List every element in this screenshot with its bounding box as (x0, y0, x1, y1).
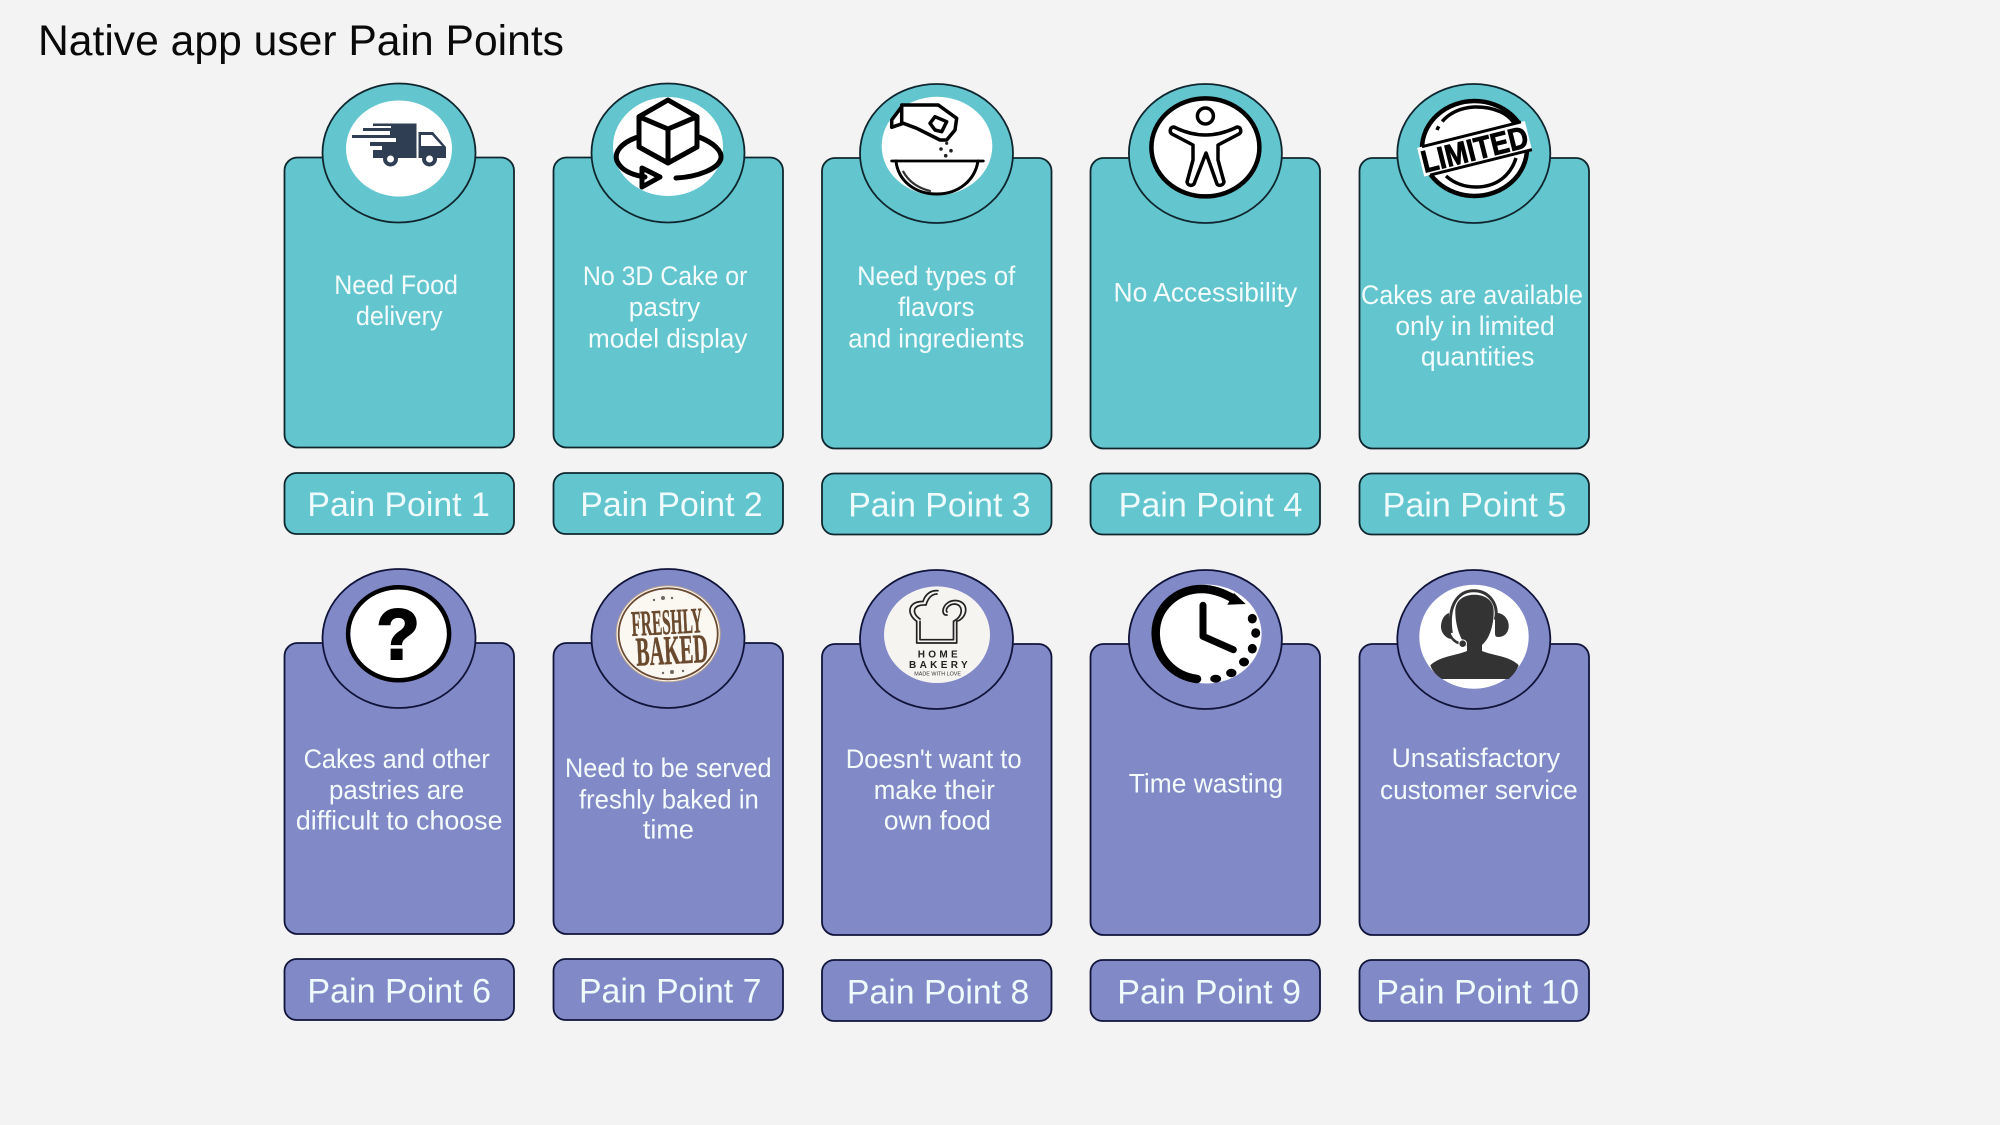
description: only in limited (1395, 311, 1555, 341)
description (334, 270, 458, 331)
icon: home bakery logo: BAKERY (909, 660, 968, 671)
card body (1090, 644, 1320, 935)
card body (822, 644, 1052, 935)
description: freshly baked in (579, 784, 759, 814)
description: Cakes are available (1361, 280, 1583, 310)
label pill (554, 473, 783, 534)
card body (284, 158, 514, 448)
label pill: Pain Point 1 (307, 486, 490, 524)
label pill (554, 959, 783, 1020)
label pill (1360, 960, 1589, 1021)
description (565, 753, 772, 845)
panel: pain point 4 (1090, 84, 1320, 534)
description (846, 744, 1022, 836)
label pill (284, 959, 514, 1020)
icon: freshly baked badge: BAKED (635, 625, 709, 675)
description (848, 261, 1024, 354)
label pill: Pain Point 7 (579, 972, 761, 1010)
description: pastries are (329, 775, 464, 805)
description: Need to be served (565, 753, 772, 783)
description (296, 744, 502, 836)
description: model display (588, 324, 748, 354)
label pill: Pain Point 10 (1376, 974, 1579, 1012)
panel: pain point 5 (1360, 84, 1589, 534)
description: and ingredients (848, 324, 1024, 354)
label pill (284, 473, 514, 534)
panel: pain point 7 (554, 569, 783, 1020)
panel: pain point 10 (1360, 570, 1589, 1021)
icon: question mark: ? (376, 596, 420, 675)
label pill: Pain Point 3 (848, 486, 1031, 524)
description: pastry (629, 292, 701, 322)
panel: pain point 9 (1090, 570, 1320, 1021)
icon: limited stamp: LIMITED (1418, 119, 1532, 180)
description: time (643, 815, 694, 845)
panel: pain point 2 (554, 84, 783, 534)
icon: home bakery logo: HOME (918, 650, 958, 660)
description: Need Food (334, 270, 458, 300)
icon: home bakery logo (860, 570, 1013, 709)
icon: limited stamp (1397, 84, 1550, 223)
description: Time wasting (1129, 769, 1283, 799)
description: make their (874, 775, 995, 805)
label pill (1360, 474, 1589, 534)
card body (1360, 644, 1589, 935)
card body (1360, 158, 1589, 448)
description: customer service (1380, 775, 1578, 805)
panel: pain point 1 (284, 84, 514, 534)
card body (554, 643, 783, 934)
description: difficult to choose (296, 806, 502, 836)
icon: clock (1129, 570, 1282, 709)
icon: customer service agent (1397, 570, 1550, 709)
icon: hand sprinkling into bowl (860, 84, 1013, 223)
description: flavors (898, 292, 974, 322)
description: Cakes and other (304, 744, 490, 774)
label pill: Pain Point 6 (307, 972, 491, 1010)
description: delivery (356, 301, 443, 331)
label pill: Pain Point 2 (580, 486, 763, 524)
label pill (822, 960, 1052, 1021)
card body (822, 158, 1052, 448)
description: Need types of (857, 261, 1016, 291)
description: Doesn't want to (846, 744, 1022, 774)
icon: rotating 3D cube (592, 84, 744, 222)
description: Unsatisfactory (1392, 743, 1560, 773)
description (1380, 743, 1578, 805)
icon: delivery truck (322, 84, 476, 222)
icon: home bakery logo: MADE WITH LOVE (914, 672, 961, 678)
icon: freshly baked badge (592, 569, 744, 708)
label pill (1090, 960, 1320, 1021)
label pill: Pain Point 9 (1117, 974, 1301, 1012)
label pill (822, 474, 1052, 534)
description (1361, 280, 1583, 371)
label pill: Pain Point 4 (1119, 486, 1302, 524)
label pill: Pain Point 8 (847, 974, 1029, 1012)
description: No Accessibility (1114, 278, 1298, 308)
panel: pain point 3 (822, 84, 1052, 534)
icon: question mark (322, 569, 476, 708)
title: Native app user Pain Points (38, 17, 564, 65)
description (583, 261, 748, 354)
description: No 3D Cake or (583, 261, 747, 291)
panel: pain point 8 (822, 570, 1052, 1021)
label pill: Pain Point 5 (1383, 486, 1566, 524)
description: quantities (1421, 341, 1534, 371)
card body (1090, 158, 1320, 448)
icon: freshly baked badge: FRESHLY (630, 600, 703, 644)
card body (554, 158, 783, 448)
panel: pain point 6 (284, 569, 514, 1020)
description: own food (884, 806, 991, 836)
icon: accessibility figure (1129, 84, 1282, 223)
card body (284, 643, 514, 934)
label pill (1090, 474, 1320, 534)
